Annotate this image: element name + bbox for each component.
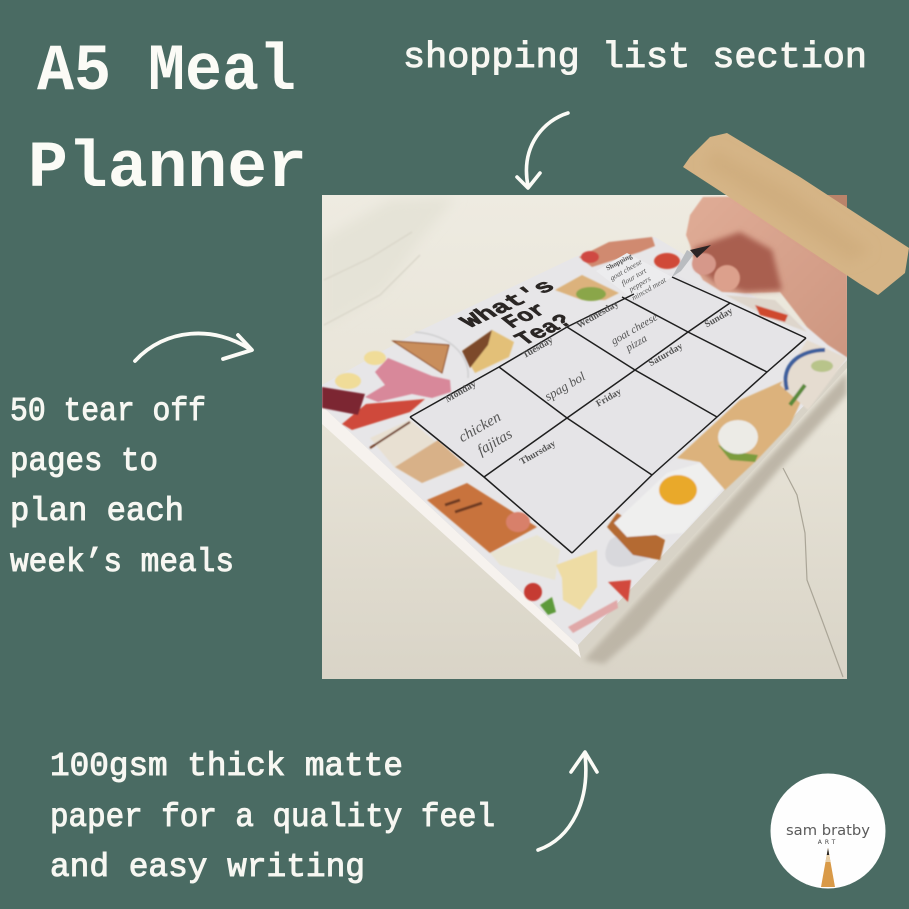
label: shopping list section: shopping list section xyxy=(403,37,867,78)
logo: sam bratby art: ART xyxy=(818,839,838,846)
food: tomato and leaf xyxy=(524,583,542,601)
pad top surface xyxy=(322,237,847,645)
food: plate curve xyxy=(415,332,468,378)
title: A5 Meal xyxy=(37,34,296,109)
day labels: Shopping xyxy=(605,252,634,272)
food: sandwich xyxy=(470,330,514,374)
food: tomato wedge xyxy=(608,580,631,602)
icon: pencil xyxy=(821,848,835,887)
planner grid xyxy=(410,253,806,553)
hand holding pen xyxy=(672,195,848,358)
photo: meal planner pad on marble xyxy=(322,195,848,679)
photo tan corner behind tape xyxy=(800,195,847,208)
body text: paper quality: 100gsm thick matte xyxy=(50,748,403,785)
food: avocado toast xyxy=(555,275,619,300)
food: fried egg white xyxy=(614,463,728,537)
handwritten meals: spag bol xyxy=(542,368,588,404)
food illustrations xyxy=(322,237,847,633)
food: lettuce xyxy=(490,535,560,580)
title: Planner xyxy=(28,131,307,206)
handwritten meals: pizza xyxy=(623,332,650,355)
handwritten meals: chicken xyxy=(456,409,504,446)
marble surface xyxy=(322,195,847,679)
heading on pad: What's xyxy=(455,276,562,333)
food: egg yolk xyxy=(659,475,697,505)
day labels xyxy=(444,252,735,468)
food: flatbread xyxy=(370,420,464,475)
food: tomato near pen xyxy=(654,253,680,269)
handwritten meals: fajitas xyxy=(475,426,515,459)
body text: paper quality: paper for a quality feel xyxy=(50,799,495,836)
food: right corner plate xyxy=(780,340,847,410)
handwritten meals: minced meat xyxy=(630,275,668,302)
day labels: Sunday xyxy=(703,306,735,330)
food: pastry xyxy=(427,483,537,553)
handwritten meals: goat cheese xyxy=(609,311,660,348)
food: eggs xyxy=(335,373,361,389)
food: top border under hand xyxy=(725,295,807,332)
body text: tear off pages: week’s meals xyxy=(10,544,234,581)
handwritten meals xyxy=(456,257,668,459)
arrow: to paper xyxy=(538,752,597,850)
food: hash browns xyxy=(676,381,801,490)
heading on pad: Tea? xyxy=(509,310,579,350)
body text: tear off pages xyxy=(10,393,234,581)
day labels: Monday xyxy=(444,379,478,405)
pad shadow xyxy=(584,372,847,664)
food: potatoes xyxy=(556,550,597,610)
day labels: Tuesday xyxy=(521,335,555,361)
logo: sam bratby art xyxy=(770,774,886,888)
heading on pad: For xyxy=(497,299,554,333)
body text: tear off pages: pages to xyxy=(10,443,158,480)
body text: tear off pages: 50 tear off xyxy=(10,393,206,430)
washi tape xyxy=(683,133,909,295)
day labels: Thursday xyxy=(518,439,558,468)
day labels: Saturday xyxy=(647,341,685,369)
handwritten meals: peppers xyxy=(626,274,652,294)
title xyxy=(28,34,307,206)
food: beans xyxy=(342,399,425,430)
pad side edges xyxy=(322,358,847,658)
handwritten meals: goat cheese xyxy=(608,257,644,283)
logo: sam bratby art: sam bratby xyxy=(786,823,870,839)
food: toast under egg xyxy=(607,513,665,560)
body text: paper quality xyxy=(50,748,495,886)
food: toast xyxy=(393,341,449,373)
body text: tear off pages: plan each xyxy=(10,493,184,530)
food: small plate and greens xyxy=(718,445,758,462)
shopping list box xyxy=(611,253,636,292)
pen xyxy=(672,250,694,277)
day labels: Friday xyxy=(595,387,624,409)
day labels: Wednesday xyxy=(575,299,621,331)
food: bacon strip xyxy=(568,600,618,633)
food: bacon xyxy=(365,358,451,402)
food: sausages xyxy=(322,387,365,415)
food: plate arc xyxy=(606,536,651,567)
body text: paper quality: and easy writing xyxy=(50,849,365,886)
food: top right plate xyxy=(579,237,655,267)
arrow: to shopping list xyxy=(517,113,568,188)
heading on pad xyxy=(457,282,569,344)
arrow: to pad pages xyxy=(135,333,252,361)
handwritten meals: flour tort xyxy=(620,266,649,288)
